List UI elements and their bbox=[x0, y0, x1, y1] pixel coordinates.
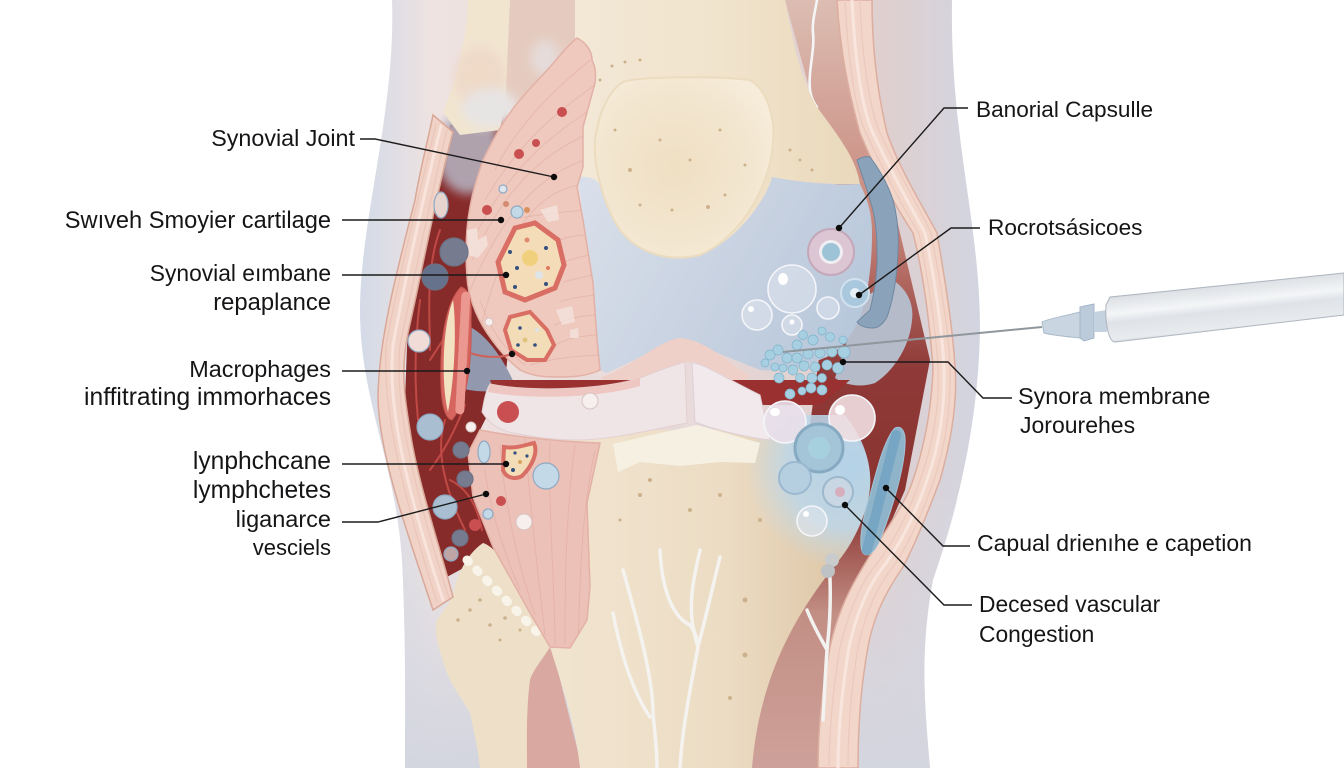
macrophage column bbox=[441, 287, 471, 420]
leader: membrane bbox=[342, 272, 509, 278]
label: synora membrane: Synora membrane bbox=[1018, 383, 1210, 409]
membrane fibres upper bbox=[470, 60, 599, 365]
muscle strip top bbox=[505, 0, 580, 110]
label: lymph: lymphchetes bbox=[193, 477, 331, 504]
label: capual: Capual drienıhe e capetion bbox=[977, 530, 1252, 556]
grey haze in cavity bbox=[436, 110, 500, 194]
leader: synora bbox=[840, 359, 1012, 398]
needle bbox=[783, 327, 1042, 352]
red cells bbox=[469, 107, 567, 531]
joint space bbox=[490, 380, 850, 405]
inflamed follicle 2 bbox=[505, 312, 554, 360]
lymph vessel bbox=[861, 427, 905, 555]
inflamed follicle 1 bbox=[498, 223, 564, 300]
hub bbox=[1042, 312, 1080, 338]
soft tissue silhouette bbox=[360, 0, 980, 768]
leader: decesed bbox=[842, 502, 972, 605]
label: macrophages: Macrophages bbox=[189, 356, 331, 382]
pale speckle on bone strip bbox=[454, 46, 506, 110]
small blue cell bbox=[841, 279, 869, 307]
tibia vessels bbox=[613, 550, 720, 768]
meniscus pink arch bbox=[600, 338, 750, 384]
leader: macrophage bbox=[342, 368, 470, 374]
muscle cavity: right bbox=[745, 0, 930, 768]
leader: synovial joint bbox=[360, 139, 557, 180]
label: lymph: liganarce bbox=[236, 506, 331, 532]
label: synovial membrane: Synovial eımbane bbox=[150, 260, 331, 286]
patella bbox=[595, 77, 773, 258]
femur bbox=[575, 0, 860, 280]
muscle between fibula and tibia bbox=[525, 640, 582, 768]
blue inflammation glow bbox=[740, 415, 870, 590]
blue capsule bbox=[857, 157, 898, 328]
bubbles right bbox=[742, 265, 875, 536]
leader: swiveh bbox=[342, 217, 504, 223]
top haze bbox=[462, 40, 559, 128]
right lower vessels bbox=[807, 553, 839, 720]
muscle cavity: left bbox=[405, 105, 525, 578]
leader: lymph bbox=[342, 461, 509, 467]
label: lymph: vesciels bbox=[253, 535, 331, 560]
left tendon band bbox=[378, 115, 453, 610]
right tendon band bbox=[818, 0, 956, 768]
blue cells lower bbox=[779, 424, 853, 507]
cluster of blue granules bbox=[761, 327, 850, 399]
grey blue fan: left bbox=[450, 322, 515, 391]
dark vesicles left bbox=[422, 238, 473, 546]
meniscus left bbox=[482, 362, 687, 440]
meniscus gap bbox=[682, 362, 696, 426]
red vessels in cavity bbox=[416, 230, 482, 530]
membrane fibres lower bbox=[485, 438, 595, 645]
flower cell top bbox=[808, 229, 854, 275]
synovial membrane lower bbox=[468, 430, 600, 648]
patella speckles bbox=[598, 58, 814, 212]
white vesicles bbox=[466, 318, 598, 530]
white nerve at top right bbox=[810, 0, 817, 107]
label: synora membrane: Jorourehes bbox=[1020, 412, 1135, 438]
bubble highlights bbox=[748, 273, 845, 517]
bone strip top left bbox=[443, 0, 510, 135]
label: swiveh smoyier cartilage: Swıveh Smoyier cartilage bbox=[65, 208, 331, 234]
fibula bbox=[436, 543, 550, 768]
label: decesed: Congestion bbox=[979, 621, 1094, 647]
label: synovial membrane: repaplance bbox=[213, 289, 331, 316]
label: banorial capsule: Banorial Capsulle bbox=[976, 97, 1153, 122]
pale patches on membrane bbox=[467, 205, 579, 338]
pale vesicles left bbox=[408, 185, 559, 561]
inflamed follicle 3 bbox=[503, 443, 535, 478]
leader: capsule bbox=[836, 108, 968, 231]
connective red curve bbox=[470, 353, 512, 357]
fibula speckles bbox=[456, 598, 522, 642]
label: lymph: lynphchcane bbox=[193, 448, 331, 475]
fibula knobs bbox=[467, 560, 537, 632]
barrel bbox=[1106, 273, 1344, 342]
meniscus fringe bbox=[613, 425, 760, 472]
label: synovial joint: Synovial Joint bbox=[211, 125, 356, 151]
articular cartilage bbox=[578, 177, 872, 373]
label: rocrotsasicoes: Rocrotsásicoes bbox=[988, 215, 1142, 240]
syringe bbox=[783, 273, 1344, 352]
meniscus right bbox=[692, 363, 770, 440]
meniscus pink lip bbox=[488, 378, 640, 397]
label: decesed: Decesed vascular bbox=[979, 591, 1161, 617]
tibia speckles bbox=[618, 478, 762, 700]
synovial membrane upper bbox=[466, 38, 600, 377]
tibia bbox=[540, 430, 870, 768]
leader: ligament bbox=[342, 491, 489, 522]
muscle fan: right grey-blue bbox=[835, 280, 912, 385]
label: macrophages: inffitrating immorhaces bbox=[84, 384, 331, 411]
leader: rocrot bbox=[856, 228, 980, 298]
dot: follicle bbox=[509, 351, 515, 357]
leader: capual bbox=[883, 485, 970, 546]
